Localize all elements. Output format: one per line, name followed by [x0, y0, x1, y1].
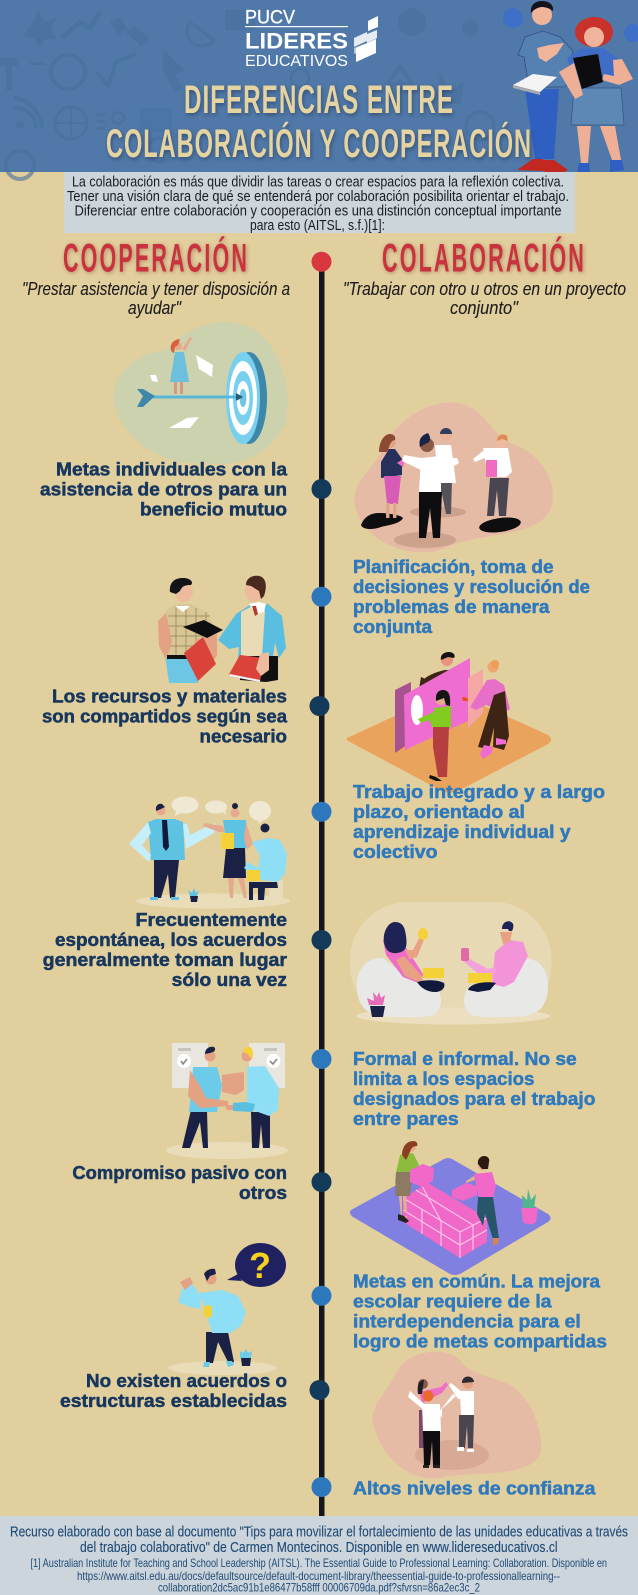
- timeline dot 8: [312, 1286, 332, 1306]
- text: frecuentemente espontánea: generalmente toman lugar: [43, 950, 287, 970]
- illustration: high five: [372, 1352, 541, 1478]
- text: planificación: problemas de manera: [353, 597, 551, 617]
- text: metas individuales: asistencia de otros para un: [40, 480, 287, 500]
- definition: cooperación: ayudar": [128, 298, 182, 318]
- text: metas en común: escolar requiere de la: [353, 1292, 553, 1312]
- logo: PUCV Líderes Educativos: PUCV: [245, 6, 295, 28]
- definition: colaboración: conjunto": [450, 298, 519, 318]
- text: compromiso pasivo: otros: [239, 1183, 287, 1203]
- text: recursos y materiales: necesario: [200, 726, 287, 746]
- timeline dot 10: [312, 1477, 332, 1497]
- timeline dot 4: [312, 802, 332, 822]
- timeline dot 2: [312, 587, 332, 607]
- text: frecuentemente espontánea: espontánea, los acuerdos: [55, 930, 287, 950]
- text: trabajo integrado: plazo, orientado al: [353, 802, 525, 822]
- illustration: handshake: [166, 1043, 288, 1159]
- definition: cooperación: [22, 279, 290, 318]
- text: planificación: decisiones y resolución de: [353, 577, 590, 597]
- text: frecuentemente espontánea: [43, 910, 287, 990]
- text: trabajo integrado: Trabajo integrado y a largo: [353, 782, 605, 802]
- illustration: two men sharing materials: [158, 576, 286, 683]
- text: no existen acuerdos: estructuras establecidas: [60, 1391, 287, 1411]
- illustration: team planning: [354, 402, 553, 552]
- intro text panel: Diferenciar entre colaboración y cooperación es una distinción conceptual importante: [74, 202, 562, 220]
- timeline dot 1: [312, 479, 332, 499]
- text: frecuentemente espontánea: sólo una vez: [172, 970, 287, 990]
- illustration: person with question bubble: ?: [249, 1245, 271, 1286]
- text: recursos y materiales: son compartidos según sea: [42, 706, 288, 726]
- heading: cooperación: COOPERACIÓN: [63, 235, 249, 281]
- logo: PUCV Líderes Educativos: [245, 6, 378, 70]
- text: metas en común: logro de metas compartidas: [353, 1332, 607, 1352]
- footer panel: collaboration2dc5ac91b1e86477b58fff 00006709da.pdf?sfvrsn=86a2ec3c_2: [158, 1581, 480, 1595]
- text: trabajo integrado: colectivo: [353, 842, 438, 862]
- text: metas en común: Metas en común. La mejora: [353, 1272, 601, 1292]
- text: formal e informal: limita a los espacios: [353, 1069, 534, 1089]
- timeline dot 3: [310, 696, 330, 716]
- text: metas individuales: beneficio mutuo: [140, 500, 287, 520]
- text: metas en común: [353, 1272, 607, 1352]
- illustration: building blocks: [350, 1141, 550, 1275]
- header band: [0, 0, 638, 179]
- footer panel: [0, 1516, 638, 1595]
- text: trabajo integrado: [353, 782, 605, 862]
- logo: PUCV Líderes Educativos: LIDERES: [245, 29, 348, 54]
- text: metas en común: interdependencia para el: [353, 1312, 581, 1332]
- text: compromiso pasivo: Compromiso pasivo con: [72, 1163, 287, 1183]
- text: recursos y materiales: Los recursos y materiales: [52, 686, 287, 706]
- text: trabajo integrado: aprendizaje individual y: [353, 822, 571, 842]
- timeline dot 5: [312, 930, 332, 950]
- intro text panel: [64, 172, 575, 234]
- text: metas individuales: [40, 460, 288, 520]
- text: formal e informal: Formal e informal. No se: [353, 1049, 577, 1069]
- text: planificación: Planificación, toma de: [353, 557, 554, 577]
- text: planificación: conjunta: [353, 617, 433, 637]
- text: formal e informal: entre pares: [353, 1109, 459, 1129]
- title: [106, 78, 532, 166]
- icon: target and arrow: [113, 322, 288, 464]
- text: planificación: [353, 557, 590, 637]
- text: altos niveles de confianza: Altos niveles de confianza: [353, 1478, 596, 1498]
- title: DIFERENCIAS ENTRE: [184, 78, 454, 122]
- text: frecuentemente espontánea: Frecuentemente: [136, 910, 287, 930]
- text: formal e informal: [353, 1049, 595, 1129]
- intro text panel: para esto (AITSL, s.f.)[1]:: [250, 217, 385, 234]
- illustration: person with question bubble: [168, 1243, 286, 1375]
- timeline dot 6: [312, 1049, 332, 1069]
- illustration: two teachers: [503, 1, 638, 176]
- illustration: bean bag talk: [350, 902, 552, 1024]
- timeline line: [319, 262, 324, 1516]
- text: metas individuales: Metas individuales con la: [56, 460, 288, 480]
- text: no existen acuerdos: [60, 1371, 287, 1411]
- illustration: group conversation: [129, 796, 290, 908]
- logo: PUCV Líderes Educativos: EDUCATIVOS: [245, 53, 348, 70]
- definition: colaboración: [343, 279, 626, 318]
- text: compromiso pasivo: [72, 1163, 287, 1203]
- text: no existen acuerdos: No existen acuerdos o: [86, 1371, 287, 1391]
- text: formal e informal: designados para el trabajo: [353, 1089, 595, 1109]
- timeline dot 9: [310, 1380, 330, 1400]
- definition: cooperación: "Prestar asistencia y tener disposición a: [22, 279, 290, 299]
- timeline dot 7: [312, 1172, 332, 1192]
- text: recursos y materiales: [42, 686, 288, 746]
- timeline dot red: [312, 252, 332, 272]
- illustration: people at pink panels: [346, 652, 551, 792]
